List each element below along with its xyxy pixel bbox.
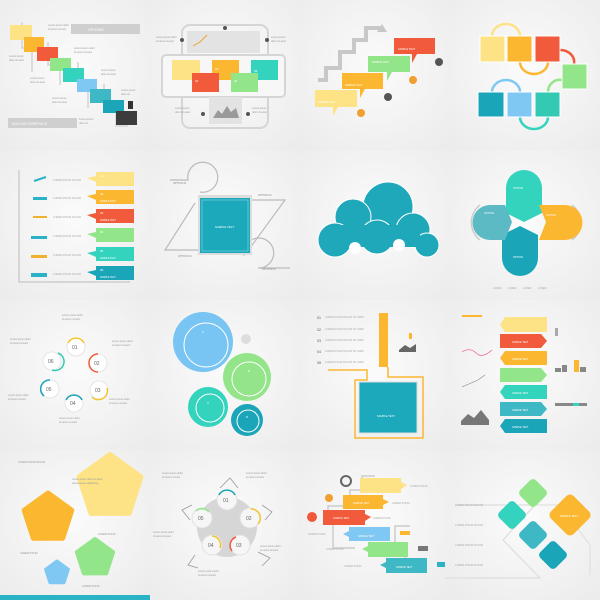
panel: arrow banner list with charts: SAMPLE TEXT: [512, 426, 529, 429]
panel: banner list: 01: [100, 174, 104, 178]
panel: staircase options: Lorem ipsum: [52, 97, 66, 100]
panel: staircase options: Lorem ipsum: [9, 55, 23, 58]
panel: banner list: LOREM IPSUM DOLOR: [53, 215, 81, 219]
panel: square options: OPTION 01: [173, 181, 187, 185]
panel: six step circle: Lorem ipsum dolor: [10, 338, 31, 341]
panel: list with yellow tab: 01: [317, 316, 321, 320]
panel: arrow banner list with charts: SAMPLE TEXT: [512, 409, 529, 412]
panel: cycle wheel: Lorem ipsum dolor: [162, 472, 183, 475]
panel: banner list: SAMPLE TEXT: [100, 257, 116, 260]
panel: winding banners: LOREM IPSUM: [392, 502, 410, 505]
panel: six step circle: 06: [48, 359, 54, 365]
panel: stair speech bubbles: SAMPLE TEXT: [345, 84, 363, 87]
panel: banner list: 03: [100, 211, 104, 215]
panel: banner list: [19, 170, 134, 282]
panel: cycle wheel: sit amet consect: [246, 476, 264, 479]
panel: winding banners: LOREM IPSUM: [410, 485, 428, 488]
panel: winding banners: SAMPLE TEXT: [358, 535, 375, 538]
panel: staircase options: OPTIONS: [88, 28, 104, 32]
panel: winding banners: LOREM IPSUM: [373, 517, 391, 520]
panel: cycle wheel: Lorem ipsum dolor: [246, 472, 267, 475]
panel: cycle wheel: sit amet consect: [153, 535, 171, 538]
panel: device frame: 02: [195, 79, 199, 83]
panel: four arrows: OPTION: [513, 186, 523, 190]
panel: six step circle: sit amet consect: [112, 344, 130, 347]
panel: list with yellow tab: 03: [317, 339, 321, 343]
panel: staircase options: Lorem ipsum dolor: [48, 24, 69, 27]
panel: device frame: Lorem ipsum: [271, 36, 285, 39]
panel: staircase options: dolor sit amet: [9, 59, 24, 62]
panel: banner list: SAMPLE TEXT: [100, 276, 116, 279]
panel: list with yellow tab: 04: [317, 350, 321, 354]
panel: staircase options: sit amet consect: [48, 28, 66, 31]
panel: staircase options: dolor sit: [79, 122, 88, 125]
panel: list with yellow tab: LOREM IPSUM DOLOR SIT AMET: [325, 328, 365, 331]
panel: cycle wheel: 05: [198, 516, 204, 522]
panel: list with yellow tab: SAMPLE TEXT: [377, 414, 395, 418]
panel: staircase options: dolor sit amet: [30, 81, 45, 84]
panel: cycle wheel: sit amet consect: [198, 574, 216, 577]
panel: cycle wheel: sit amet consect: [260, 549, 278, 552]
panel: winding banners: SAMPLE TEXT: [396, 566, 413, 569]
panel: device frame: Lorem ipsum: [175, 107, 189, 110]
panel: banner list: 02: [100, 192, 104, 196]
panel: bubble circles: [173, 312, 271, 436]
panel: cycle wheel: 03: [236, 543, 242, 549]
panel: pentagons: LOREM IPSUM: [98, 533, 116, 536]
panel: pentagons: LOREM IPSUM: [82, 585, 100, 588]
panel: diamonds: LOREM IPSUM DOLOR: [455, 563, 483, 567]
panel: puzzle: [478, 24, 587, 129]
panel: six step circle: sit amet consect: [59, 421, 77, 424]
panel: six step circle: 04: [70, 401, 76, 407]
panel: cycle wheel: 02: [246, 516, 252, 522]
panel: list with yellow tab: [317, 313, 423, 438]
panel: diamonds: LOREM IPSUM DOLOR: [455, 523, 483, 527]
panel: cycle wheel: Lorem ipsum dolor: [198, 570, 219, 573]
panel: cycle wheel: Lorem ipsum dolor: [153, 531, 174, 534]
panel: cycle wheel: [153, 472, 281, 577]
panel: six step circle: Lorem ipsum dolor: [8, 394, 29, 397]
panel: banner list: LOREM IPSUM DOLOR: [53, 272, 81, 276]
panel: list with yellow tab: LOREM IPSUM DOLOR SIT AMET: [325, 316, 365, 319]
panel: pentagons: [0, 455, 150, 600]
panel: device frame: dolor sit amet: [271, 40, 286, 43]
panel: winding banners: LOREM IPSUM: [326, 548, 344, 551]
panel: device frame: 04: [234, 79, 238, 83]
panel: arrow banner list with charts: SAMPLE TEXT: [512, 358, 529, 361]
panel: staircase options: Lorem ipsum: [30, 77, 44, 80]
panel: device frame: sit amet consect: [156, 40, 174, 43]
panel: four arrows: LOREM: [523, 287, 532, 290]
panel: pentagons: Lorem ipsum dolor sit amet: [72, 478, 102, 481]
panel: device frame: 03: [215, 67, 219, 71]
panel: six step circle: Lorem ipsum dolor: [109, 398, 130, 401]
panel: square options: OPTION 03: [262, 267, 276, 271]
panel: bubble circles: B: [248, 369, 250, 373]
panel: arrow banner list with charts: SAMPLE TEXT: [512, 392, 529, 395]
panel: banner list: SAMPLE TEXT: [100, 200, 116, 203]
panel: four arrows: OPTION: [546, 213, 556, 217]
panel: diamonds: SAMPLE TEXT: [560, 514, 578, 518]
panel: stair speech bubbles: SAMPLE TEXT: [372, 61, 390, 64]
panel: six step circle: sit amet consect: [109, 402, 127, 405]
panel: bubble circles: A: [202, 330, 204, 334]
panel: banner list: LOREM IPSUM DOLOR: [53, 253, 81, 257]
panel: six step circle: [8, 314, 133, 424]
panel: device frame: Lorem ipsum: [252, 107, 266, 110]
panel: six step circle: Lorem ipsum dolor: [62, 314, 83, 317]
panel: staircase options: sit amet consect: [74, 51, 92, 54]
panel: stair speech bubbles: SAMPLE TEXT: [318, 101, 336, 104]
panel: staircase options: dolor sit: [121, 93, 130, 96]
panel: square options: SAMPLE TEXT: [215, 225, 235, 229]
panel: staircase options: ADD INFOGRAPHICS: [12, 122, 48, 126]
panel: banner list: 04: [100, 230, 104, 234]
panel: four arrows: [471, 170, 582, 290]
panel: winding banners: SAMPLE TEXT: [353, 502, 370, 505]
panel: stair speech bubbles: [315, 24, 443, 117]
panel: list with yellow tab: LOREM IPSUM DOLOR SIT AMET: [325, 350, 365, 353]
panel: winding banners: [307, 476, 445, 573]
panel: four arrows: LOREM: [493, 287, 502, 290]
panel: square options: OPTION 02: [258, 193, 272, 197]
panel: arrow banner list with charts: SAMPLE TEXT: [512, 341, 529, 344]
panel: arrow banner list with charts: [461, 315, 587, 433]
panel: list with yellow tab: 05: [317, 361, 321, 365]
panel: list with yellow tab: LOREM IPSUM DOLOR SIT AMET: [325, 361, 365, 364]
panel: bubble circles: D: [246, 415, 249, 419]
panel: device frame: dolor sit amet: [175, 111, 190, 114]
panel: banner list: LOREM IPSUM DOLOR: [53, 234, 81, 238]
panel: four arrows: LOREM: [508, 287, 517, 290]
panel: banner list: LOREM IPSUM DOLOR: [53, 196, 81, 200]
panel: square options: OPTION 04: [178, 254, 192, 258]
panel: square options: [165, 162, 290, 271]
panel: diamonds: [445, 477, 593, 578]
panel: six step circle: Lorem ipsum dolor: [112, 340, 133, 343]
panel: six step circle: Lorem ipsum dolor: [59, 417, 80, 420]
panel: four arrows: LOREM: [538, 287, 547, 290]
panel: list with yellow tab: LOREM IPSUM DOLOR SIT AMET: [325, 339, 365, 342]
panel: diamonds: LOREM IPSUM DOLOR: [455, 543, 483, 547]
panel: winding banners: SAMPLE TEXT: [333, 517, 350, 520]
panel: device frame: dolor sit amet: [252, 111, 267, 114]
panel: four arrows: OPTION: [513, 255, 523, 259]
panel: pentagons: LOREM IPSUM DOLOR: [18, 461, 45, 464]
panel: banner list: 05: [100, 249, 104, 253]
panel: staircase options: dolor sit amet: [52, 101, 67, 104]
panel: staircase options: Lorem ipsum: [79, 118, 93, 121]
panel: pentagons: consectetuer adipiscing: [72, 482, 99, 485]
panel: winding banners: LOREM IPSUM: [344, 565, 362, 568]
panel: device frame: 05: [254, 69, 258, 73]
panel: pentagons: LOREM IPSUM: [20, 552, 38, 555]
panel: banner list: SAMPLE TEXT: [100, 219, 116, 222]
panel: six step circle: 01: [72, 345, 78, 351]
panel: cycle wheel: sit amet consect: [162, 476, 180, 479]
panel: banner list: LOREM IPSUM DOLOR: [53, 178, 81, 182]
panel: device frame: [156, 25, 286, 128]
panel: bubble circles: C: [207, 401, 210, 405]
panel: staircase options: dolor sit amet: [101, 73, 116, 76]
panel: winding banners: LOREM IPSUM: [308, 533, 326, 536]
panel: cycle wheel: Lorem ipsum dolor: [260, 545, 281, 548]
panel: staircase options: Lorem ipsum: [121, 89, 135, 92]
panel: list with yellow tab: 02: [317, 328, 321, 332]
panel: six step circle: sit amet consect: [10, 342, 28, 345]
panel: staircase options: [8, 22, 140, 128]
panel: six step circle: sit amet consect: [8, 398, 26, 401]
panel: device frame: Lorem ipsum dolor: [156, 36, 177, 39]
panel: staircase options: Lorem ipsum dolor: [74, 47, 95, 50]
panel: six step circle: 02: [94, 361, 100, 367]
panel: staircase options: Lorem ipsum: [101, 69, 115, 72]
panel: stair speech bubbles: SAMPLE TEXT: [398, 48, 416, 51]
panel: cycle wheel: 01: [223, 498, 229, 504]
panel: diamonds: LOREM IPSUM DOLOR: [455, 503, 483, 507]
panel: six step circle: 05: [46, 387, 52, 393]
panel: cycle wheel: 04: [208, 543, 214, 549]
panel: cloud circles: [318, 182, 439, 257]
panel: six step circle: sit amet consect: [62, 318, 80, 321]
panel: four arrows: OPTION: [484, 211, 494, 215]
panel: six step circle: 03: [95, 388, 101, 394]
panel: banner list: 06: [100, 268, 104, 272]
